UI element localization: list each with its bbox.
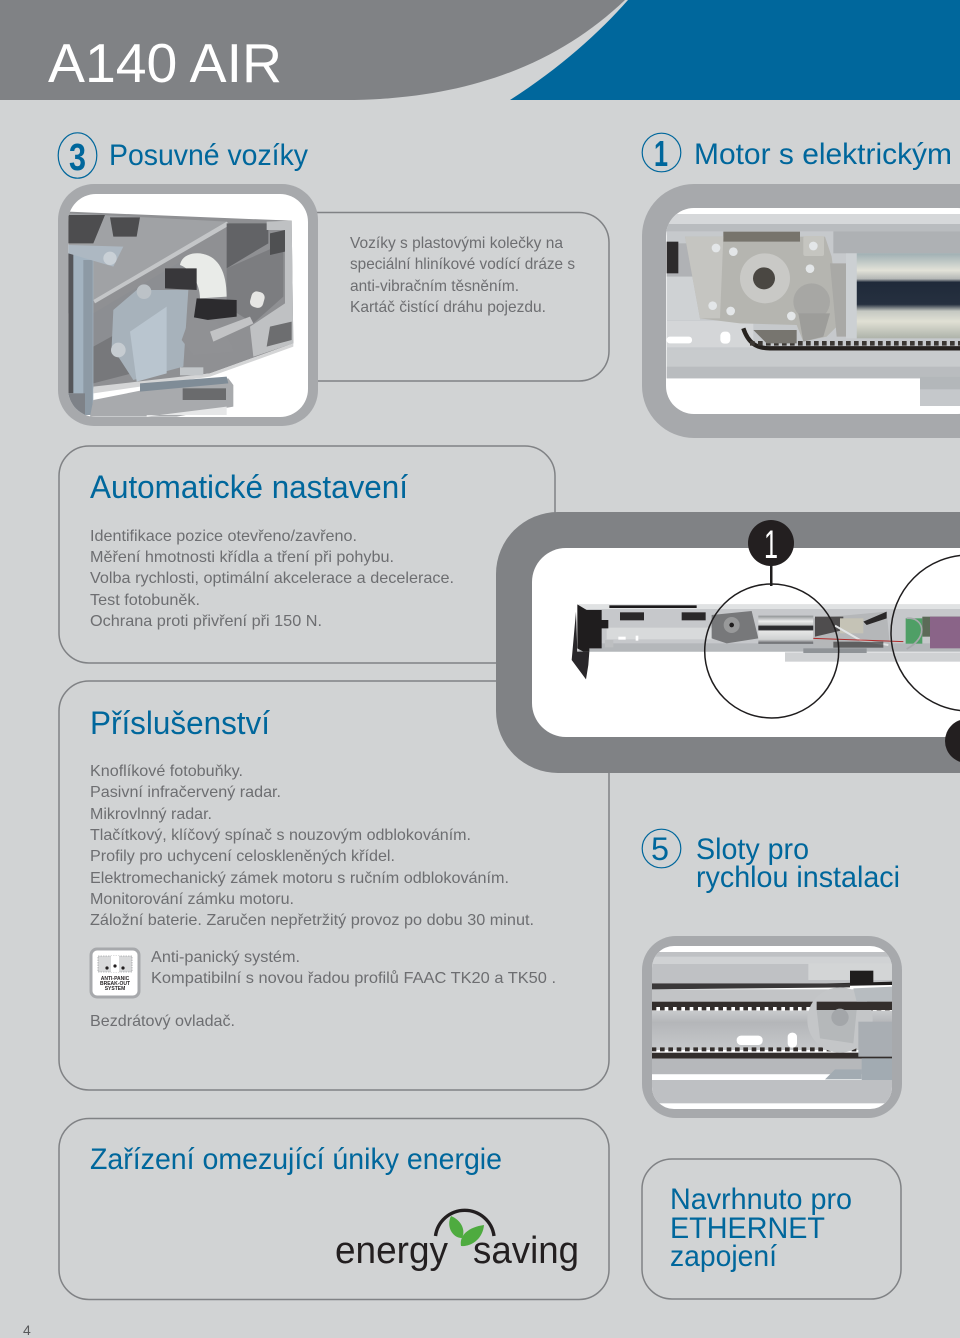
- header grey shape: [0, 0, 625, 100]
- badge 1: [748, 520, 794, 567]
- accessories list: Monitorování zámku motoru.: [90, 891, 294, 908]
- icon: anti-panic system: SYSTEM: [105, 986, 125, 992]
- carriage text: [350, 235, 575, 316]
- wireless controller text: Bezdrátový ovladač.: [90, 1013, 235, 1030]
- logo leaves: [449, 1216, 484, 1246]
- carriage text: anti-vibračním těsněním.: [350, 278, 519, 295]
- carriage text: Vozíky s plastovými kolečky na: [350, 235, 563, 252]
- panel text: zapojení: [670, 1240, 778, 1273]
- section heading: Posuvné vozíky: [58, 133, 308, 179]
- energy saving logo: saving: [473, 1230, 579, 1272]
- title: A140 AIR: [48, 32, 282, 94]
- heading text: rychlou instalaci: [696, 861, 900, 894]
- number ring 5: [642, 829, 681, 868]
- diagram frame: full operator: [496, 512, 960, 773]
- number ring 1: [642, 133, 681, 172]
- feature list: Test fotobuněk.: [90, 592, 200, 609]
- accessories list: Knoflíkové fotobuňky.: [90, 763, 243, 780]
- logo arc: [436, 1210, 494, 1236]
- panel outline: [59, 446, 555, 663]
- panel outline: [642, 1159, 901, 1299]
- accessories list: Profily pro uchycení celoskleněných křídel.: [90, 848, 395, 865]
- section heading: Sloty pro rychlou instalaci: [642, 829, 900, 894]
- carriage photo illustration: [68, 212, 293, 417]
- panel: carriage description: [300, 212, 609, 381]
- carriage text: speciální hliníkové vodící dráze s: [350, 256, 575, 273]
- heading text: Sloty pro: [696, 833, 809, 866]
- heading: Příslušenství: [90, 705, 270, 741]
- motor photo illustration: [667, 214, 960, 406]
- panel outline: [59, 681, 609, 1090]
- photo frame: sliding carriage: [58, 184, 318, 426]
- number 1: 1: [654, 133, 668, 174]
- panel: Automatické nastavení: [59, 446, 555, 663]
- energy saving logo: [335, 1210, 579, 1272]
- accessories list: [90, 763, 534, 929]
- icon: anti-panic system: [91, 949, 139, 997]
- callout circle 2: [891, 555, 960, 711]
- panel: Navrhnuto pro ETHERNET zapojení: [642, 1159, 901, 1299]
- panel text: ETHERNET: [670, 1212, 825, 1245]
- photo frame: motor: [642, 184, 960, 438]
- anti-panic text: [151, 949, 556, 987]
- accessories list: Záložní baterie. Zaručen nepřetržitý provoz po dobu 30 minut.: [90, 912, 534, 929]
- heading text: [696, 833, 900, 894]
- section heading: Motor s elektrickým: [642, 133, 952, 174]
- number 5: 5: [651, 831, 669, 867]
- operator illustration: [572, 604, 960, 679]
- feature list: Ochrana proti přivření při 150 N.: [90, 613, 322, 630]
- accessories list: Pasivní infračervený radar.: [90, 784, 281, 801]
- heading text: Posuvné vozíky: [109, 139, 308, 172]
- icon: anti-panic system: ANTI-PANIC: [101, 976, 130, 982]
- panel: Zařízení omezující úniky energie: [59, 1118, 609, 1300]
- header band: [0, 0, 960, 100]
- feature list: Volba rychlosti, optimální akcelerace a decelerace.: [90, 570, 454, 587]
- accessories list: Tlačítkový, klíčový spínač s nouzovým odblokováním.: [90, 827, 471, 844]
- heading text: Motor s elektrickým: [694, 138, 952, 171]
- number ring 3: [58, 133, 97, 178]
- anti-panic text: Anti-panický systém.: [151, 949, 300, 966]
- accessories list: Elektromechanický zámek motoru s ručním odblokováním.: [90, 870, 509, 887]
- belt photo illustration: [652, 952, 892, 1103]
- feature list: [90, 528, 454, 630]
- connector line: [770, 560, 772, 586]
- heading: Automatické nastavení: [90, 469, 408, 505]
- badge 1: 1: [764, 523, 778, 567]
- panel text: Navrhnuto pro: [670, 1183, 852, 1216]
- feature list: Měření hmotnosti křídla a tření při pohybu.: [90, 549, 394, 566]
- feature list: Identifikace pozice otevřeno/zavřeno.: [90, 528, 357, 545]
- page number: 4: [23, 1322, 31, 1338]
- badge 2: [945, 719, 960, 763]
- accessories list: Mikrovlnný radar.: [90, 806, 212, 823]
- callout circle 1: [705, 584, 839, 718]
- panel: Příslušenství: [59, 681, 609, 1090]
- number 3: 3: [69, 137, 86, 179]
- heading: Zařízení omezující úniky energie: [90, 1143, 502, 1176]
- logo words: energy: [335, 1230, 448, 1272]
- photo frame: belt slots: [642, 936, 902, 1118]
- carriage text: Kartáč čistící dráhu pojezdu.: [350, 299, 546, 316]
- icon: anti-panic system: BREAK-OUT: [100, 981, 130, 987]
- panel outline: [300, 212, 609, 381]
- anti-panic text: Kompatibilní s novou řadou profilů FAAC TK20 a TK50 .: [151, 969, 556, 987]
- header blue wedge: [510, 0, 960, 100]
- panel text: [670, 1183, 852, 1273]
- panel outline: [59, 1118, 609, 1300]
